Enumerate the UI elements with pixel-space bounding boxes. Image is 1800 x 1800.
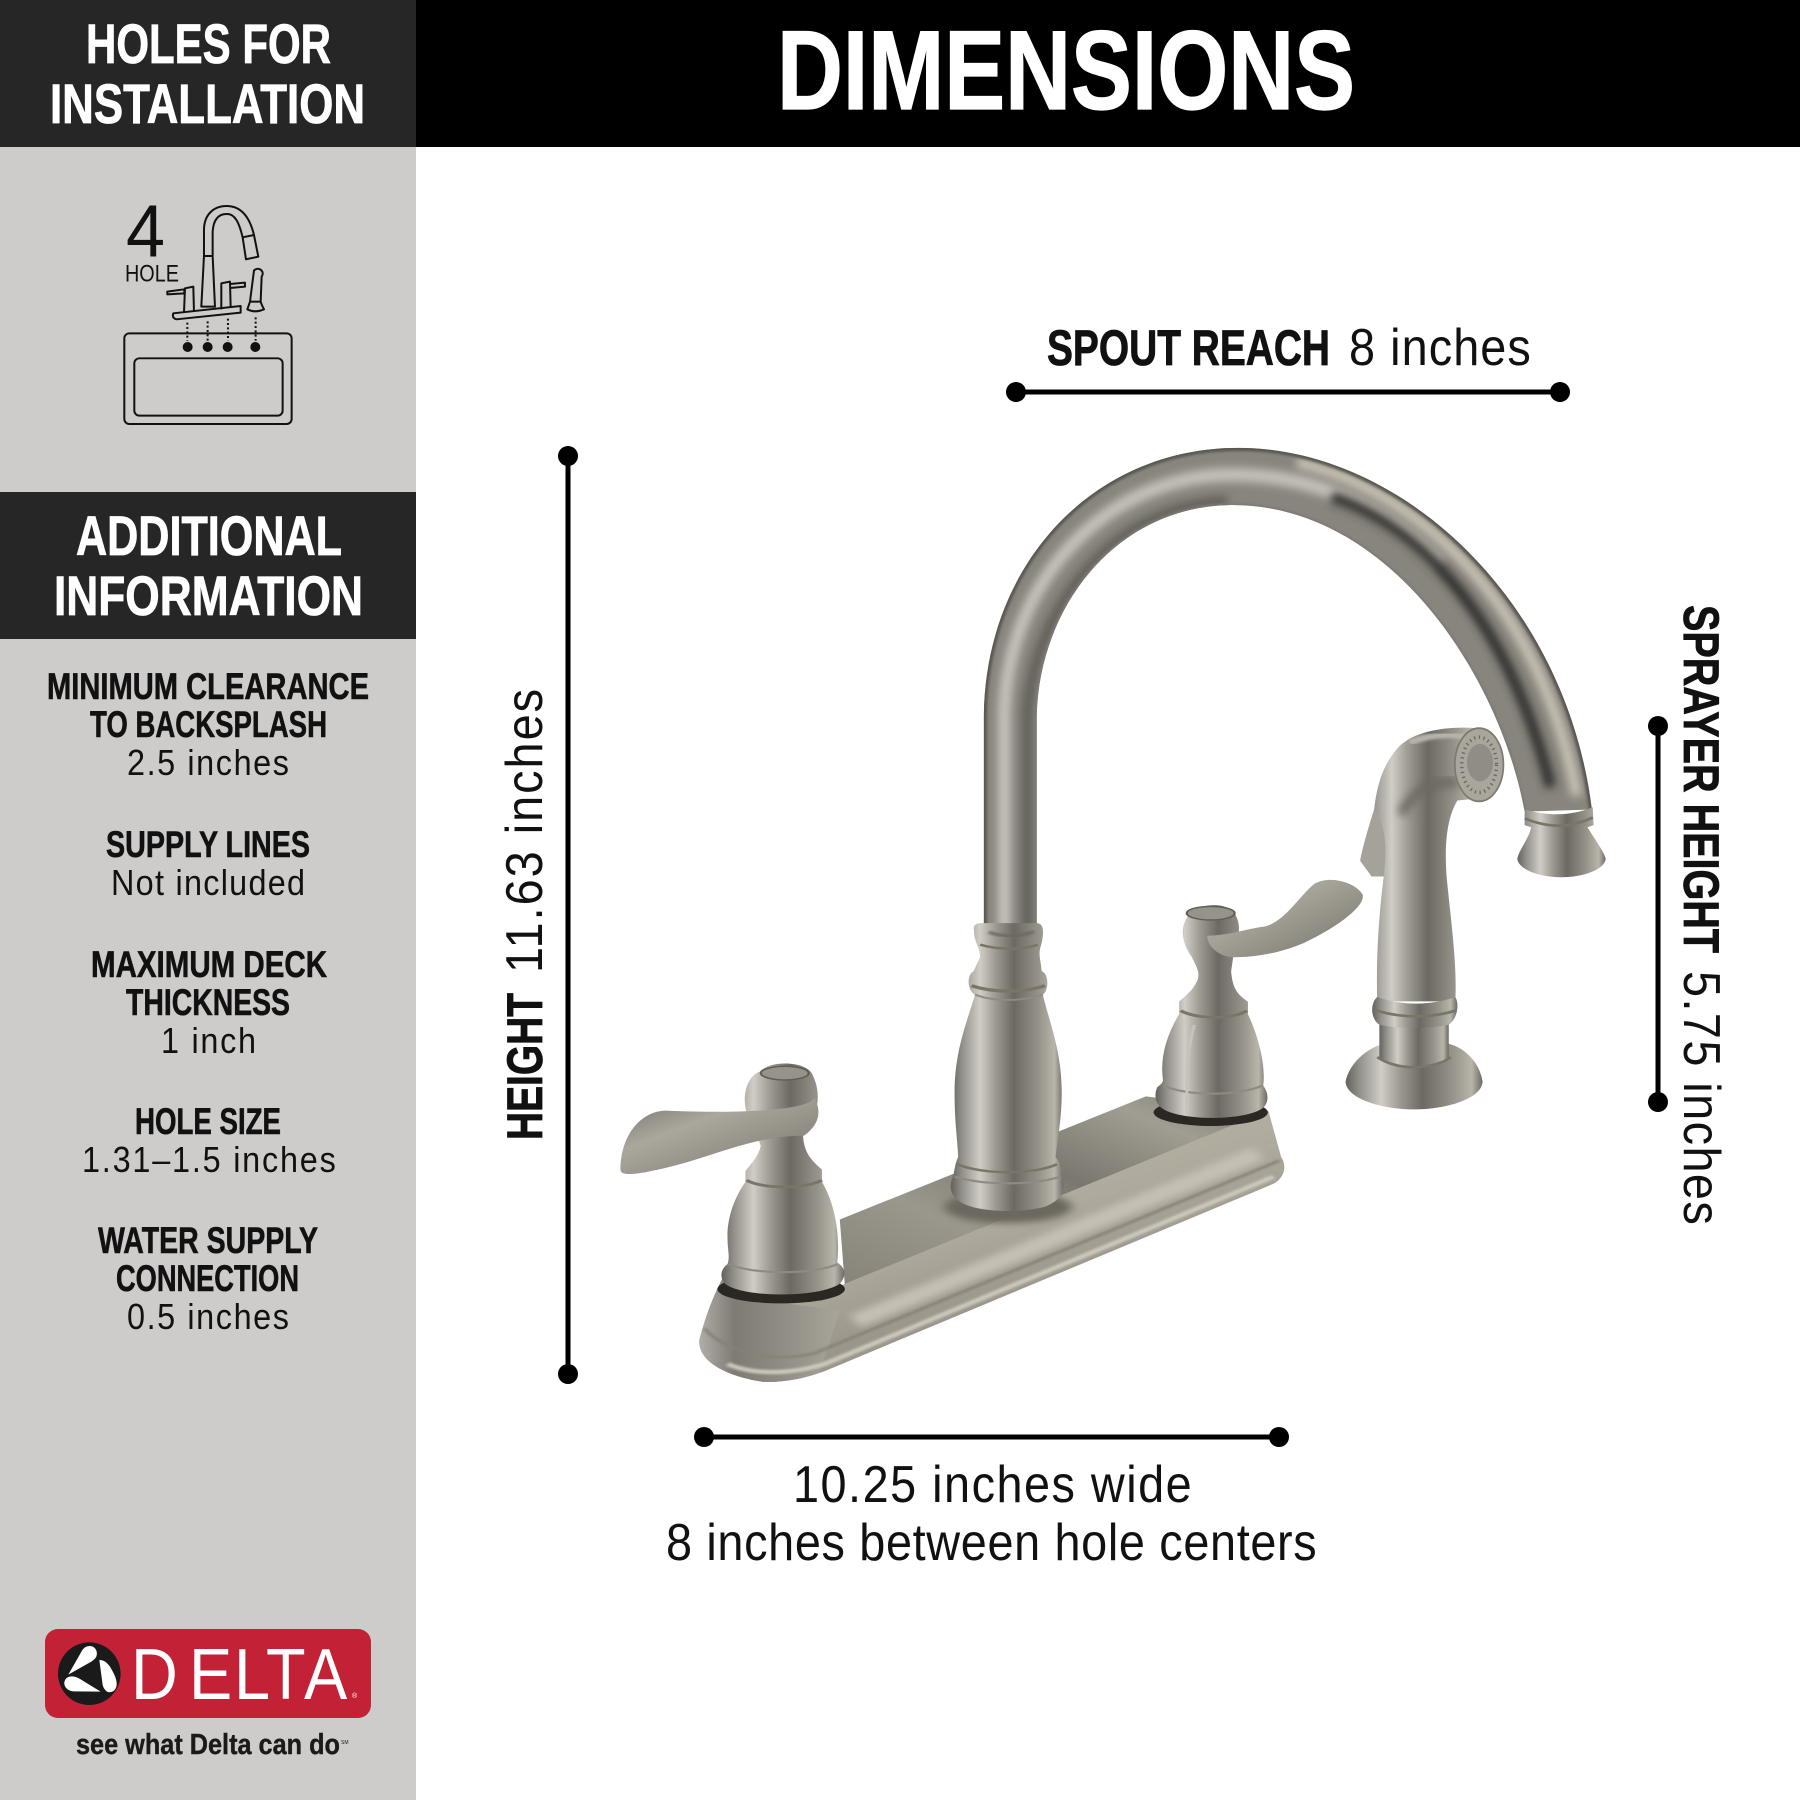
spec: maximum deck thickness: MAXIMUM DECK [91,944,327,985]
spec: water supply connection: CONNECTION [116,1258,299,1299]
panel: sidebar [0,0,416,1800]
spout [984,448,1606,939]
sprayer [1346,728,1503,1109]
icon: four hole sink and faucet [124,190,292,424]
dimension: sprayer height: SPRAYER HEIGHT [1673,605,1729,953]
logo: delta: SM [341,1740,348,1746]
logo: delta: see what Delta can do [76,1729,340,1761]
header: additional information: ADDITIONAL [76,504,342,567]
title: dimensions: DIMENSIONS [777,8,1355,133]
header: holes for installation [0,0,416,147]
header: additional information [0,492,416,639]
dimension: width: 8 inches between hole centers [666,1514,1317,1572]
spec: supply lines: SUPPLY LINES [106,824,310,865]
logo: delta: DELTA [131,1634,348,1715]
spec: water supply connection: 0.5 inches [127,1297,289,1337]
dimension: height [496,446,578,1384]
icon: four hole sink and faucet: HOLE [125,261,179,288]
spec: hole size: HOLE SIZE [135,1101,281,1142]
title: dimensions [416,0,1800,147]
dimension: height: HEIGHT [497,993,553,1140]
spec: maximum deck thickness: THICKNESS [126,982,290,1023]
header: holes for installation: INSTALLATION [50,72,365,135]
spec: water supply connection [98,1220,318,1337]
logo: delta: ® [352,1692,358,1700]
spout collar [1517,807,1606,877]
dimension: spout reach: SPOUT REACH [1047,320,1330,376]
faucet illustration [620,448,1606,1382]
spec: hole size [82,1101,336,1180]
spec: minimum clearance: TO BACKSPLASH [90,704,327,745]
spec: minimum clearance: MINIMUM CLEARANCE [47,666,369,707]
dimension: sprayer height [1648,605,1730,1225]
dimension: spout reach [1006,319,1570,402]
logo: delta [45,1629,371,1761]
dimension: width [666,1427,1317,1572]
spec: minimum clearance: 2.5 inches [127,743,289,783]
center hub [951,923,1064,1211]
spec: supply lines [106,824,310,903]
spec: minimum clearance [47,666,369,783]
spec: water supply connection: WATER SUPPLY [98,1220,318,1261]
right handle [1155,880,1363,1118]
header: holes for installation: HOLES FOR [86,12,331,75]
dimension: height: 11.63 inches [496,689,554,973]
spec: hole size: 1.31–1.5 inches [82,1140,336,1180]
dimension: spout reach: 8 inches [1349,319,1531,377]
header: additional information: INFORMATION [54,564,363,627]
dimension: sprayer height: 5.75 inches [1672,971,1730,1225]
spec: maximum deck thickness: 1 inch [161,1021,256,1061]
left handle [620,1064,844,1294]
deck plate [699,1096,1284,1382]
icon: four hole sink and faucet: 4 [126,190,165,273]
spec: maximum deck thickness [91,944,327,1061]
spec: supply lines: Not included [111,863,305,903]
dimension: width: 10.25 inches wide [793,1456,1192,1514]
